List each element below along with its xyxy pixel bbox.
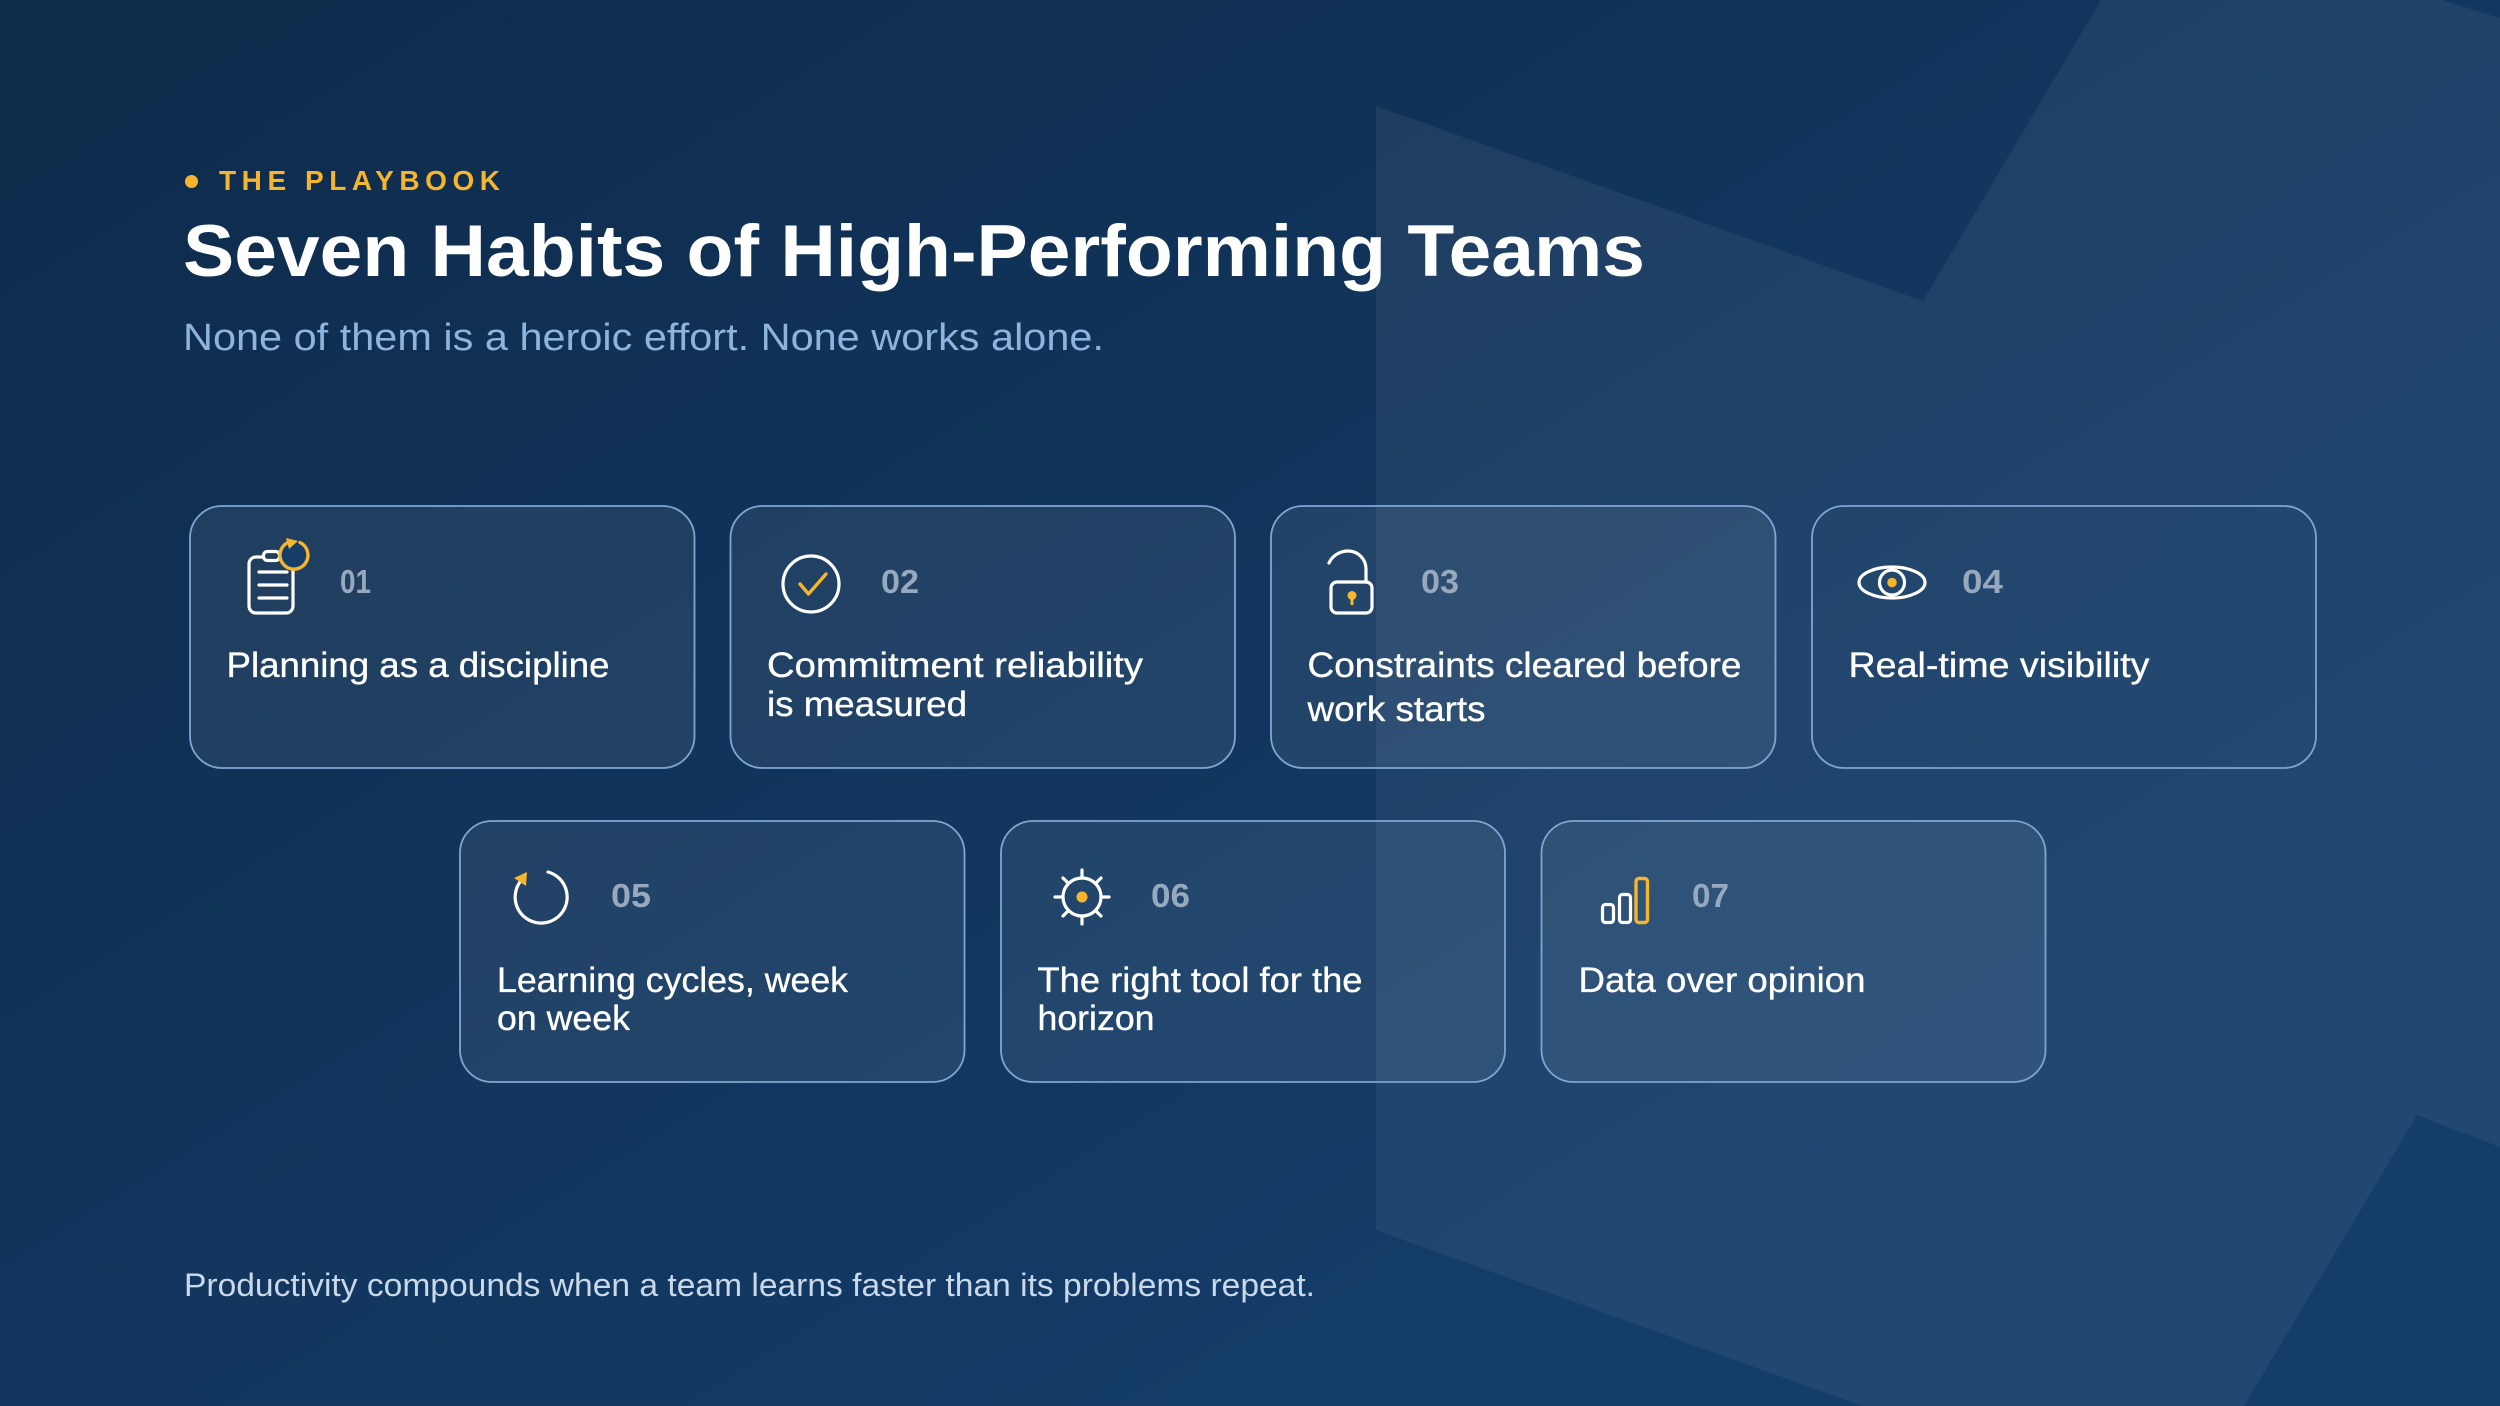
number: 04 [1962,563,2004,600]
panel: card 02 [730,506,1235,768]
label: work starts [1306,690,1486,729]
label [767,646,1144,724]
panel: card 03 [1271,506,1776,768]
icon: sun gear [1055,870,1109,924]
label: Commitment reliability [767,646,1144,685]
label: Data over opinion [1578,961,1866,1000]
panel: card 06 [1001,821,1505,1082]
label: The right tool for the [1038,961,1362,1000]
number: 07 [1692,877,1729,914]
label [1306,646,1742,729]
subtitle: None of them is a heroic effort. None works alone. [183,317,1104,359]
number: 02 [881,563,919,600]
panel: card 07 [1542,821,2046,1082]
label: Planning as a discipline [226,646,610,685]
background shape [1376,0,2500,1406]
label: Real-time visibility [1848,646,2150,685]
icon: bar chart [1602,878,1648,922]
label: on week [497,999,630,1038]
title: Seven Habits of High-Performing Teams [183,211,1645,292]
number: 05 [611,877,651,914]
panel: card 04 [1812,506,2316,768]
icon: open lock [1329,551,1372,613]
panel: card 05 [460,821,964,1082]
icon: eye [1859,567,1925,598]
panel: card 01 [190,506,694,768]
icon: clipboard with cycle [249,538,308,613]
number: 06 [1151,877,1190,914]
footer note: Productivity compounds when a team learns faster than its problems repeat. [184,1267,1315,1303]
eyebrow: THE PLAYBOOK [219,165,500,196]
header [183,165,1645,359]
label: Learning cycles, week [497,961,849,1000]
label [497,961,849,1038]
icon: cycle arrow [514,872,567,923]
label: horizon [1038,999,1154,1038]
label [1038,961,1362,1038]
label: is measured [767,685,967,724]
number: 03 [1421,563,1459,600]
label: Constraints cleared before [1308,646,1742,685]
icon: check circle [783,556,839,612]
number: 01 [340,563,371,600]
